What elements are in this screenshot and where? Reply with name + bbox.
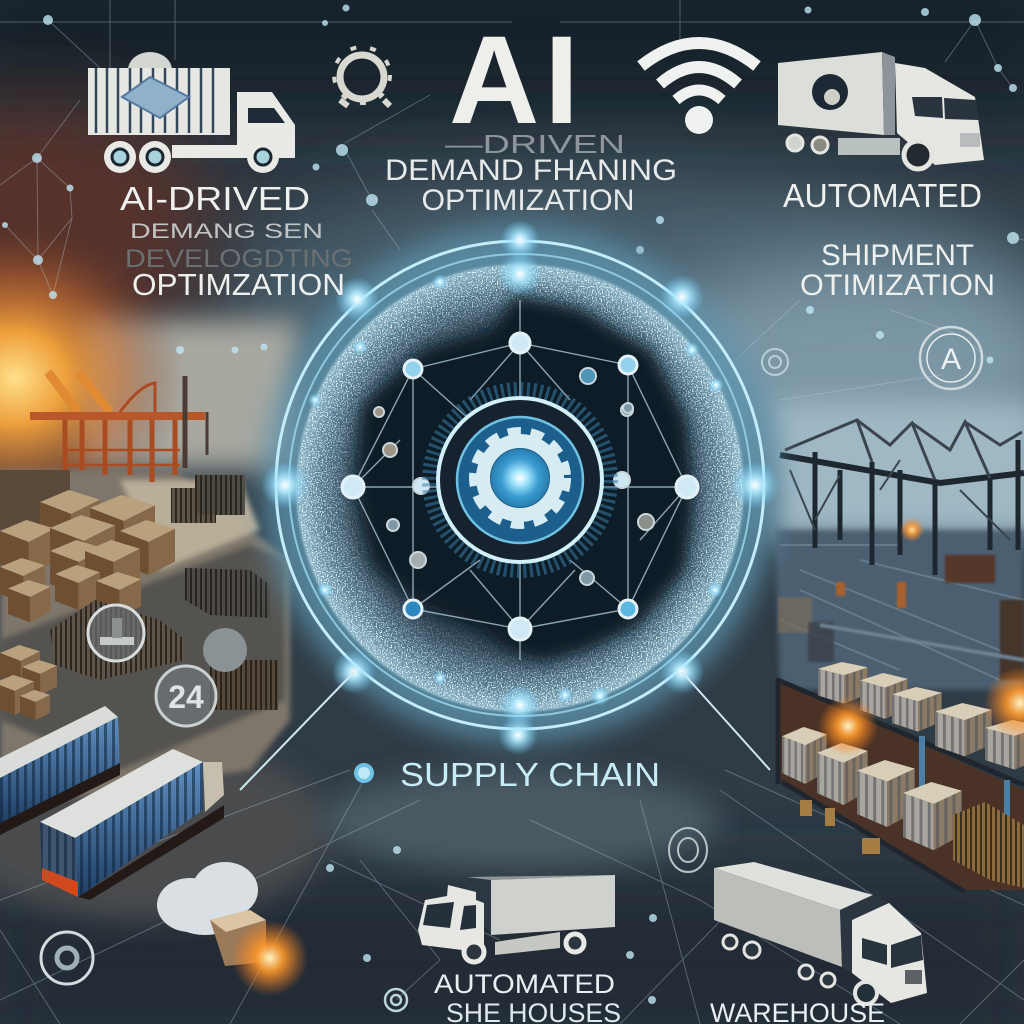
text: right labels: OTIMIZATION [800,269,995,302]
right warehouse racks and boxes [778,662,1024,892]
text: top-center labels: DEMAND FHANING [385,154,677,187]
text: right labels [783,177,995,302]
icon: small node near label [356,765,372,781]
heading: AI: AI [449,11,579,150]
text: left labels: DEMANG SEN [130,220,323,243]
icon: top-right truck [778,52,984,169]
icon: wifi [641,43,757,134]
icon: cloud and small glowing truck [157,862,308,996]
icon: concentric node above bottom-right truck [669,828,707,872]
text: top-center labels: —DRIVEN [445,129,625,159]
icon: bottom right truck [714,862,927,1004]
outer rings [276,241,764,729]
yard machinery [778,518,1024,680]
right port scene: cranes [775,420,1024,690]
icon: A badge: A [941,343,961,376]
cargo stacks [0,470,278,720]
icon: bottom center truck [418,875,615,962]
network nodes [342,333,698,640]
lower crates [782,727,962,850]
left port scene: cranes and stacked cargo [0,372,290,810]
secondary nodes [374,368,654,585]
glowing ring points [261,220,779,755]
left containers [0,706,224,900]
icon: concentric node near the right ring [762,349,788,375]
icon: orange port crane [30,372,207,482]
icon: top gear ring [334,47,390,106]
icon: top-left truck with container [88,52,295,173]
text: top-center labels [385,129,677,217]
text: right labels: SHIPMENT [821,239,974,272]
text: supply chain label: SUPPLY CHAIN [400,756,660,793]
central hub [240,220,779,790]
dark globe core [356,295,692,662]
upper crates [818,662,1024,770]
icon: A badge [920,327,982,389]
text: top-center labels: OPTIMIZATION [422,184,634,217]
icon: circular badge 24: 24 [168,679,204,715]
text: right labels: AUTOMATED [783,177,982,214]
particle globe [296,264,744,712]
icon: gear [474,432,566,524]
text: left labels: OPTIMZATION [132,267,345,302]
center dial [429,389,611,571]
icon: circular badge 24 [156,666,216,726]
text: left labels [120,180,353,302]
text: left labels: AI-DRIVED [120,180,310,217]
network lines [353,300,687,660]
icon: lower-left badge [41,932,93,984]
text: bottom labels [434,969,885,1024]
text: bottom labels: AUTOMATED [434,969,615,999]
icon: bottom small node [385,989,407,1011]
icon: circular badge [88,605,144,661]
text: left labels: DEVELOGDTING [125,245,353,273]
